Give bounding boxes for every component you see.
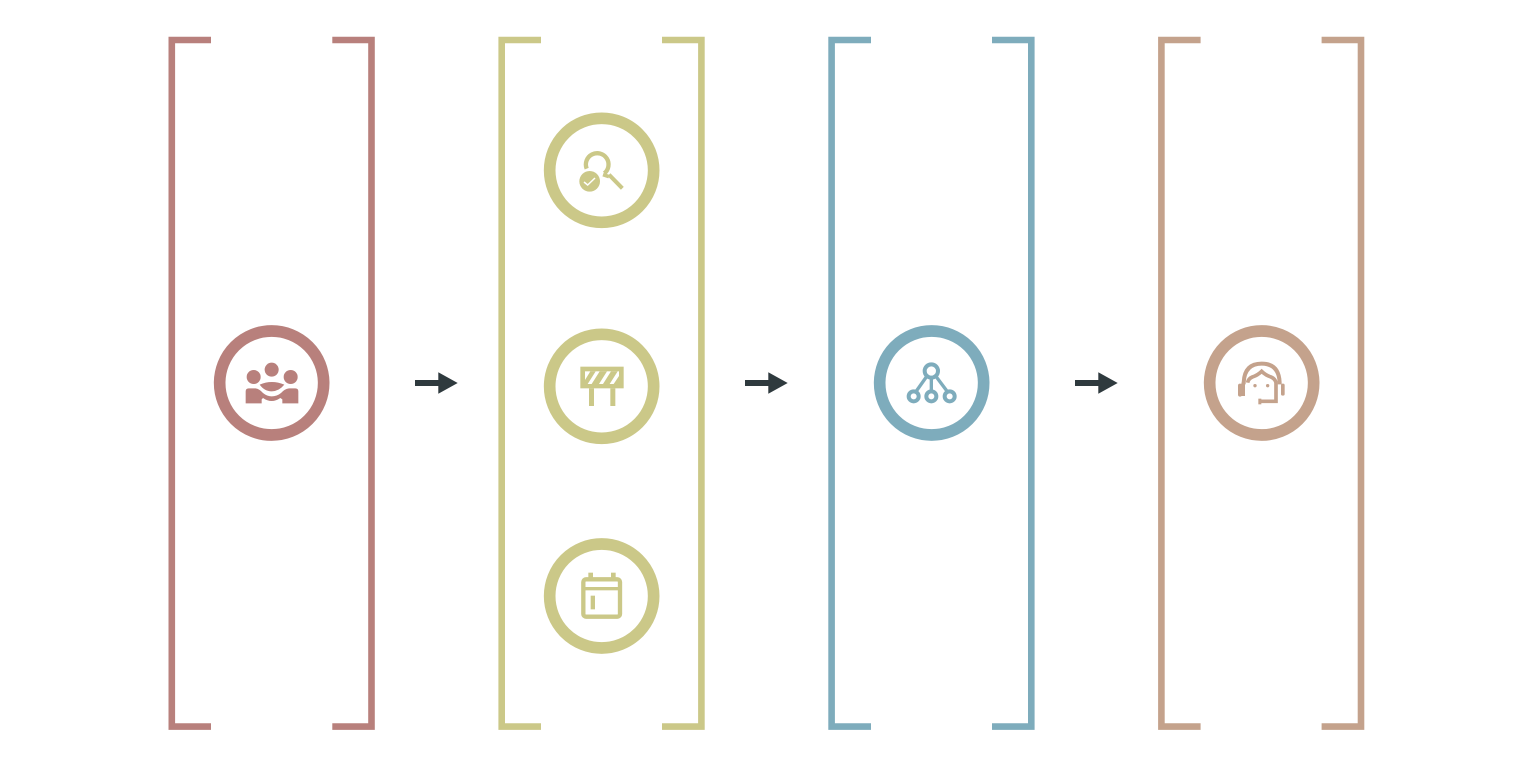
right bracket xyxy=(1322,40,1361,727)
icon: support agent headset xyxy=(1210,331,1314,435)
arrow: stage 2 to 3 xyxy=(745,372,788,394)
icon: magnifier with check xyxy=(550,118,654,222)
left bracket xyxy=(832,40,871,727)
arrow: stage 3 to 4 xyxy=(1075,372,1118,394)
panel: stage 2 xyxy=(502,40,701,727)
right bracket xyxy=(992,40,1031,727)
left bracket xyxy=(172,40,211,727)
panel: stage 3 xyxy=(832,40,1031,727)
arrow: stage 1 to 2 xyxy=(415,372,458,394)
icon: road barrier xyxy=(550,334,654,438)
icon: people meeting xyxy=(220,331,324,435)
right bracket xyxy=(332,40,372,727)
left bracket xyxy=(1161,40,1201,727)
right bracket xyxy=(662,40,701,727)
panel: stage 4 xyxy=(1161,40,1361,727)
icon: network hierarchy xyxy=(880,331,984,435)
icon: calendar xyxy=(550,544,654,648)
panel: stage 1 xyxy=(172,40,372,727)
left bracket xyxy=(502,40,541,727)
